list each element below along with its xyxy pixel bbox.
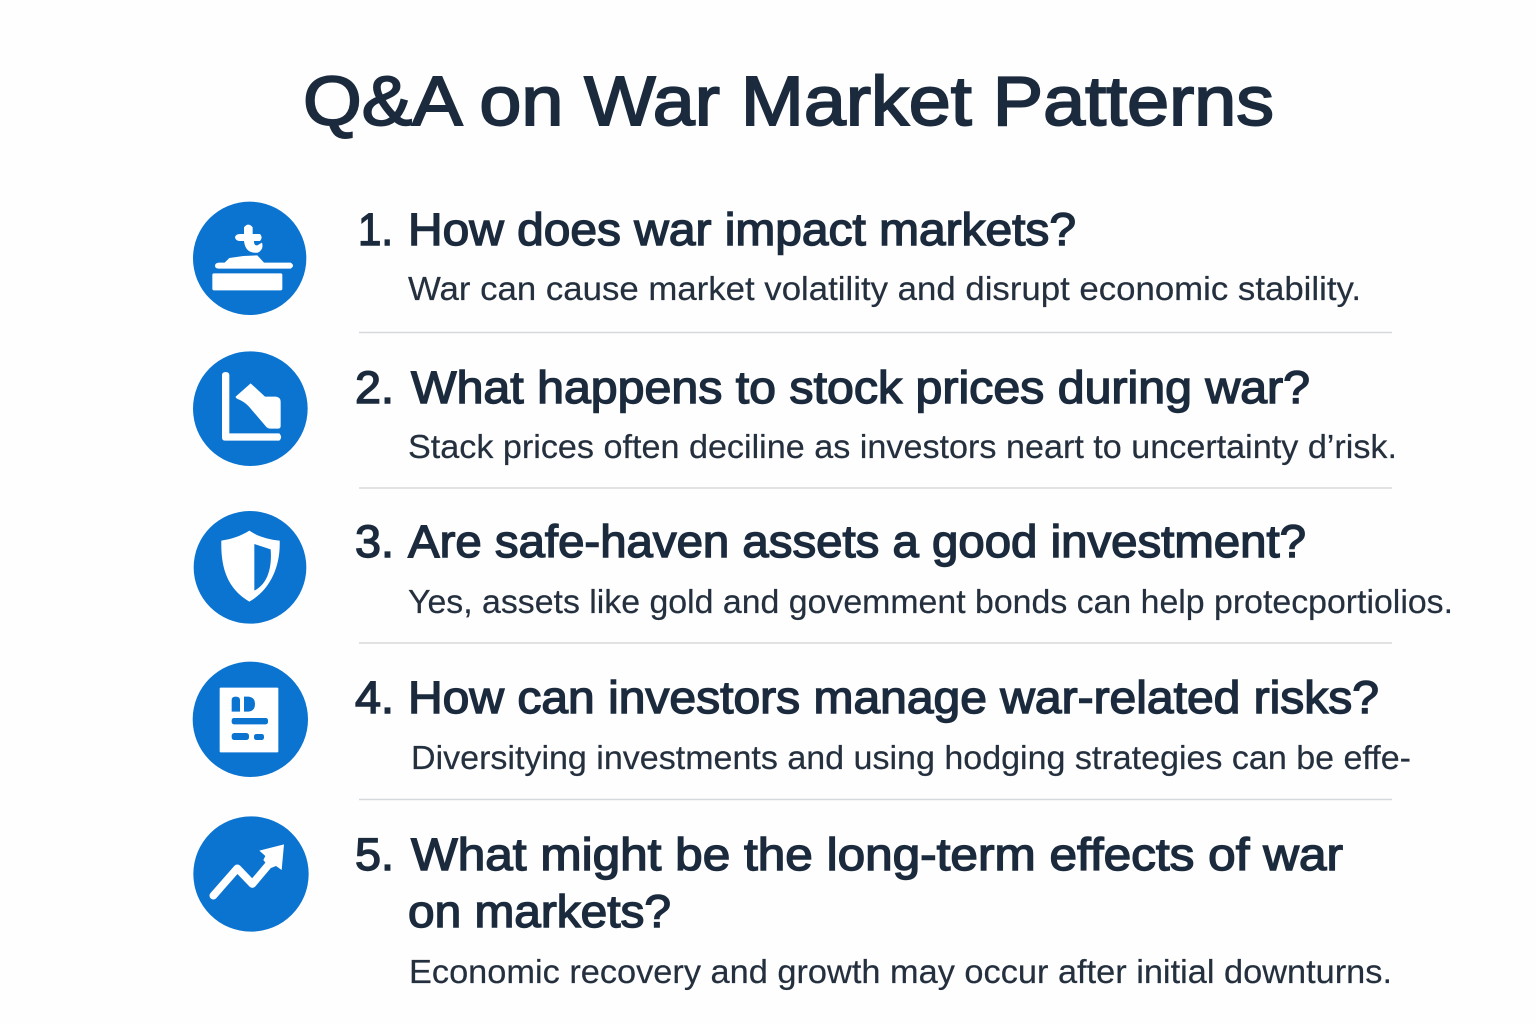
icon: rising arrow bbox=[193, 816, 309, 932]
heading: question 3: Are safe-haven assets a good investment? bbox=[408, 516, 1306, 567]
icon: document bbox=[193, 662, 308, 777]
icon: shield bbox=[194, 511, 306, 624]
answer 2: Stack prices often deciline as investors neart to uncertainty d’risk. bbox=[408, 429, 1397, 466]
question 3 bbox=[355, 516, 1453, 621]
heading: question 1: 1. bbox=[358, 204, 393, 255]
answer 3: Yes, assets like gold and govemment bonds can help protecportiolios. bbox=[408, 584, 1453, 621]
answer 4: Diversitying investments and using hodging strategies can be effe- bbox=[411, 740, 1411, 777]
heading: question 2: 2. bbox=[355, 362, 394, 413]
question 1 bbox=[358, 204, 1361, 308]
heading: question 4: 4. bbox=[355, 672, 394, 723]
heading: question 5: 5. bbox=[355, 829, 394, 880]
icon: platform with currency symbol bbox=[193, 202, 306, 315]
heading: question 3: 3. bbox=[355, 516, 394, 567]
question 2 bbox=[355, 362, 1397, 466]
question 4 bbox=[355, 672, 1411, 777]
heading: question 1: How does war impact markets? bbox=[408, 204, 1076, 255]
heading: question 2: What happens to stock prices during war? bbox=[411, 362, 1310, 413]
heading: question 5 bbox=[355, 829, 1343, 937]
answer 1: War can cause market volatility and disrupt economic stability. bbox=[408, 271, 1361, 308]
answer 5: Economic recovery and growth may occur after initial downturns. bbox=[409, 954, 1392, 991]
title: Q&A on War Market Patterns bbox=[303, 62, 1274, 140]
heading: question 5: What might be the long-term effects of war bbox=[411, 829, 1343, 880]
question 5 bbox=[355, 829, 1392, 991]
heading: question 5: on markets? bbox=[408, 886, 671, 937]
icon: falling chart bbox=[193, 351, 308, 466]
heading: question 4: How can investors manage war-related risks? bbox=[408, 672, 1379, 723]
